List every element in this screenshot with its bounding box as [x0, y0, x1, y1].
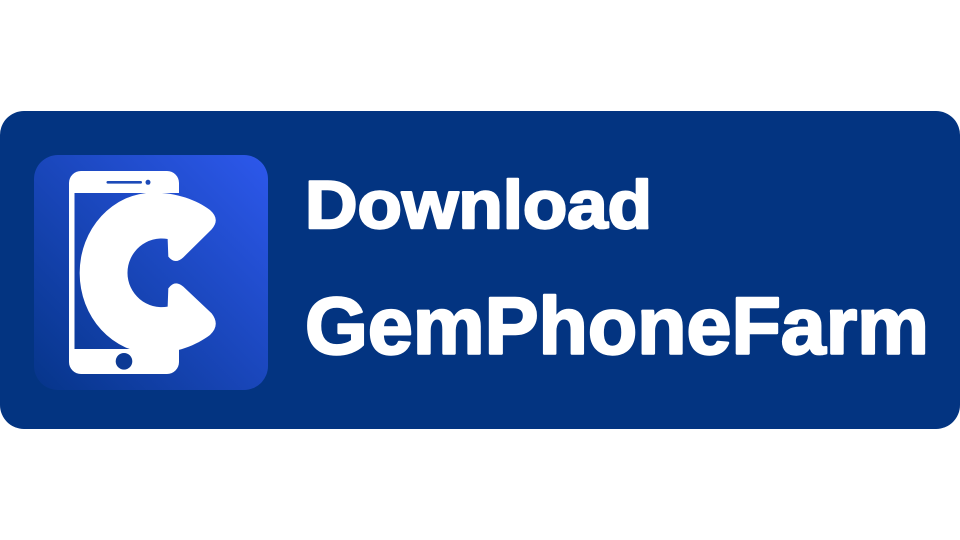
heading: GemPhoneFarm: GemPhoneFarm: [305, 282, 929, 372]
icon background: [34, 155, 268, 390]
icon: phone: [69, 171, 179, 374]
download button panel: [0, 111, 960, 429]
icon: curved C arrows: [80, 193, 216, 353]
app icon: [34, 155, 268, 390]
heading: Download: Download: [305, 167, 652, 243]
